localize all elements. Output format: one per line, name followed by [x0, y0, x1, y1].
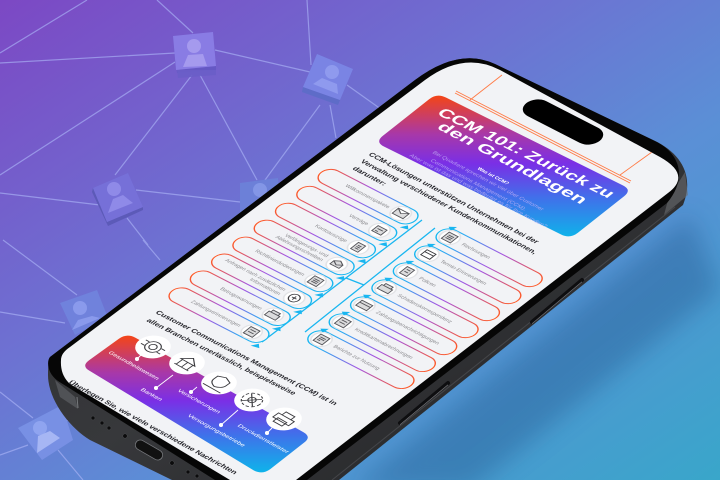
capsule: Kontoauszüge [274, 202, 376, 264]
capsule: Policen [392, 260, 500, 322]
intro paragraph: CCM-Lösungen unterstützen Unternehmen bei der [367, 151, 541, 245]
background icon: user cube 4 [240, 178, 280, 215]
side highlight [332, 207, 675, 480]
capsule: Anfragen [210, 254, 312, 314]
usb port [134, 438, 164, 462]
orange frame lines [455, 75, 652, 183]
side button lower [400, 383, 448, 425]
capsule: Rechnungen [435, 226, 543, 288]
background icon: user cube 5 [60, 290, 108, 335]
phone shadow [350, 215, 720, 480]
capsule: Richtlinienänderungen: Richtlinienänderungen [253, 249, 306, 277]
label: Gesundheitswesen: Gesundheitswesen [107, 350, 161, 381]
capsule: Zahlungserinnerungen: Zahlungserinnerungen [189, 300, 242, 328]
icon: Gesundheitswesen [135, 336, 170, 358]
capsule: Kontoauszüge: Kontoauszüge [313, 224, 348, 244]
phone body [48, 58, 688, 480]
capsule: Willkommenspakete: Willkommenspakete [343, 184, 391, 210]
capsule: Berichte zur Nutzung [307, 328, 415, 389]
capsule: Verlängerungs: Ablehnungsschreiben [273, 235, 324, 263]
capsule: Verlängerungs: Verlängerungs- und [283, 233, 329, 259]
icon: Versorgungsbetriebe [234, 388, 270, 412]
screen content [67, 75, 652, 476]
card intro text: Communications Management (CCM). [429, 159, 528, 212]
black bezel [48, 58, 679, 480]
capsule: Zahlungsbenachrichtigungen: Zahlungsbenachrichtigungen [374, 310, 441, 346]
capsule: Zahlungsbenachrichtigungen [350, 294, 458, 356]
phone metal frame [48, 58, 687, 480]
capsule: Betrugswarnungen: Betrugswarnungen [218, 287, 263, 311]
icon: Banken [169, 352, 204, 374]
capsule: Anfragen: Informationen [248, 278, 282, 296]
title card [379, 96, 628, 236]
connector spines [262, 220, 435, 342]
right capsules [303, 223, 550, 392]
capsule: Zahlungserinnerungen [168, 287, 270, 348]
label: Versorgungsbetriebe: Versorgungsbetriebe [186, 413, 247, 448]
capsule: Schadenskorrespondenz [371, 278, 479, 338]
capsule: Richtlinienänderungen [232, 236, 334, 298]
background icon: user cube 1 [173, 32, 216, 78]
capsule: Policen: Policen [417, 276, 437, 288]
background icon: user cube 2 [302, 54, 353, 105]
capsule: Rechnungen: Rechnungen [459, 242, 491, 260]
card intro text: Bei Quadient sprechen wir viel über Customer [431, 151, 545, 212]
capsule: Termin-Erinnerungen: Termin-Erinnerungen [438, 259, 488, 286]
industries paragraph: Customer Communications Management (CCM) ist in [154, 309, 340, 407]
industries card [85, 331, 309, 472]
background network lines [0, 0, 385, 480]
capsule: Kreditkartenabrechnungen [328, 312, 436, 372]
capsule: Anfragen: Anfragen nach zusätzlichen [223, 258, 287, 292]
icon: Versicherungen [201, 372, 236, 394]
capsule: Verträge: Verträge [347, 214, 370, 227]
card intro text: Was ist CCM? [476, 167, 510, 186]
side button upper [532, 280, 582, 324]
icon: Druckdienstleister [266, 408, 302, 430]
notch [522, 99, 604, 145]
connector dots [135, 354, 272, 435]
intro paragraph: Verwaltung verschiedener Kundenkommunikationen, [359, 158, 539, 255]
intro paragraph: darunter: [351, 165, 389, 187]
background icon: user cube 3 [92, 173, 143, 226]
card intro text: Aber was ist das und was bedeutet es für Ihre Kunden? [408, 154, 549, 229]
background icon: user cube 6 [18, 405, 73, 460]
label: Versicherungen: Versicherungen [176, 388, 222, 415]
speaker holes [91, 416, 199, 478]
capsule: Berichte zur Nutzung: Berichte zur Nutzung [331, 344, 381, 371]
industries paragraph: allen Branchen unerlässlich, beispielsweise [145, 317, 298, 396]
closing text: Überlegen Sie, wie viele verschiedene Nachrichten [67, 379, 240, 476]
capsule: Verlängerungs [254, 220, 355, 280]
capsule: Verträge [296, 186, 398, 246]
label: Druckdienstleister: Druckdienstleister [236, 423, 290, 455]
capsule: Willkommenspakete [317, 168, 419, 230]
phone screen [61, 62, 678, 480]
title: CCM 101: Zurück zu [433, 105, 619, 201]
title: den Grundlagen [433, 119, 592, 207]
capsule: Schadenskorrespondenz: Schadenskorrespondenz [395, 293, 454, 325]
capsule: Kreditkartenabrechnungen: Kreditkartenabrechnungen [353, 327, 414, 360]
label: Banken: Banken [139, 387, 164, 402]
capsule: Termin-Erinnerungen [414, 244, 522, 304]
capsule: Betrugswarnungen [190, 270, 291, 332]
left capsules [161, 166, 426, 349]
